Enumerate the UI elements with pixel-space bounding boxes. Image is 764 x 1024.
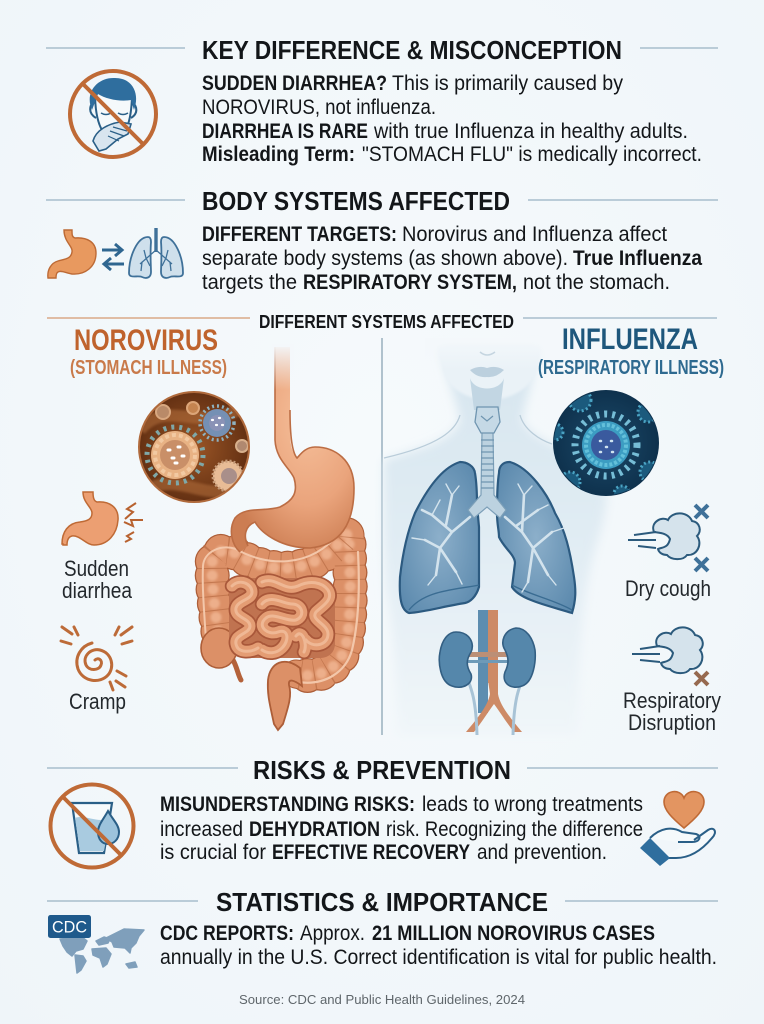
label: sudden diarrhea: Sudden [64, 556, 129, 581]
heading: risks and prevention: RISKS & PREVENTION [253, 755, 511, 785]
text block: different targets: True Influenza [573, 246, 703, 270]
text block: misunderstanding risks: leads to wrong treatments [422, 792, 643, 816]
large intestine [203, 532, 359, 683]
text block: misunderstanding risks: MISUNDERSTANDING RISKS: [160, 792, 415, 816]
heading: statistics and importance: STATISTICS & IMPORTANCE [216, 887, 548, 917]
text block: different targets: Norovirus and Influenza affect [402, 222, 667, 246]
label: disruption: Disruption [628, 710, 716, 735]
text block: cdc reports [160, 921, 717, 969]
heading: body systems affected: BODY SYSTEMS AFFECTED [202, 186, 510, 216]
heading: norovirus: NOROVIRUS [74, 324, 218, 357]
icon: cdc logo with world map [48, 915, 144, 973]
text block: different targets: targets the [202, 270, 297, 294]
text block: misunderstanding risks: EFFECTIVE RECOVERY [272, 840, 470, 864]
illustration: upper body silhouette [384, 338, 607, 735]
icon: heart and hand [640, 792, 715, 866]
rectum [268, 662, 302, 730]
icon: influenza virus [553, 390, 659, 496]
text block: cdc reports: annually in the U.S. Correct identification is vital for public health. [160, 945, 717, 969]
heading: key difference and misconception: KEY DIFFERENCE & MISCONCEPTION [202, 35, 622, 65]
text block: key difference [202, 71, 702, 166]
text block: different targets: RESPIRATORY SYSTEM, [303, 270, 517, 294]
subheading: stomach illness: (STOMACH ILLNESS) [70, 357, 227, 379]
text block: key difference: This is primarily caused by [392, 71, 623, 95]
label: diarrhea: diarrhea [62, 578, 133, 603]
stomach [231, 347, 354, 552]
icon: no vomiting face [70, 71, 156, 157]
illustration: lungs and trachea [400, 407, 575, 613]
text block: misunderstanding risks: is crucial for [160, 840, 266, 864]
text block: different targets: DIFFERENT TARGETS: [202, 222, 397, 246]
icon: respiratory disruption [632, 627, 708, 685]
panel: influenza [384, 323, 724, 735]
icon: no water glass [50, 784, 134, 868]
text block: key difference: "STOMACH FLU" is medically incorrect. [362, 142, 702, 166]
text block: cdc reports: CDC REPORTS: [160, 921, 294, 945]
panel: norovirus [61, 324, 359, 730]
icon: cdc logo with world map: CDC [52, 918, 87, 936]
text block: cdc reports: 21 MILLION NOROVIRUS CASES [372, 921, 655, 945]
bronchial tree [412, 484, 564, 592]
text block: misunderstanding risks: and prevention. [477, 840, 607, 864]
label: cramp: Cramp [69, 689, 126, 714]
text block: misunderstanding risks [160, 792, 643, 864]
text block: misunderstanding risks: DEHYDRATION [249, 817, 380, 841]
small intestine [229, 578, 335, 658]
text block: cdc reports: Approx. [300, 921, 365, 945]
label: dry cough: Dry cough [625, 576, 711, 601]
heading: influenza: INFLUENZA [562, 323, 698, 356]
label: respiratory: Respiratory [623, 688, 721, 713]
icon: cramp spiral [61, 627, 132, 690]
text block: misunderstanding risks: increased [160, 817, 243, 841]
text block: different targets: not the stomach. [523, 270, 670, 294]
text block: key difference: with true Influenza in healthy adults. [373, 119, 688, 143]
icon: norovirus particles [139, 392, 255, 502]
trachea [468, 432, 506, 518]
source note: Source: CDC and Public Health Guidelines, 2024 [239, 992, 525, 1007]
text block: misunderstanding risks: risk. Recognizing the difference [386, 817, 643, 841]
icon: stomach pain [62, 492, 143, 545]
cecum and appendix [233, 660, 241, 680]
illustration: kidneys and vessels [439, 610, 535, 735]
text block: key difference: SUDDEN DIARRHEA? [202, 71, 387, 95]
text block: key difference: Misleading Term: [202, 142, 355, 166]
text block: different targets: separate body systems (as shown above). [202, 246, 568, 270]
text block: key difference: DIARRHEA IS RARE [202, 119, 368, 143]
icon: stomach and lungs with arrows [48, 228, 183, 278]
heading: different systems affected: DIFFERENT SYSTEMS AFFECTED [259, 311, 514, 332]
text block: key difference: NOROVIRUS, not influenza. [202, 95, 436, 119]
illustration: digestive system [201, 344, 359, 730]
text block: different targets [202, 222, 703, 294]
icon: dry cough [628, 505, 708, 571]
